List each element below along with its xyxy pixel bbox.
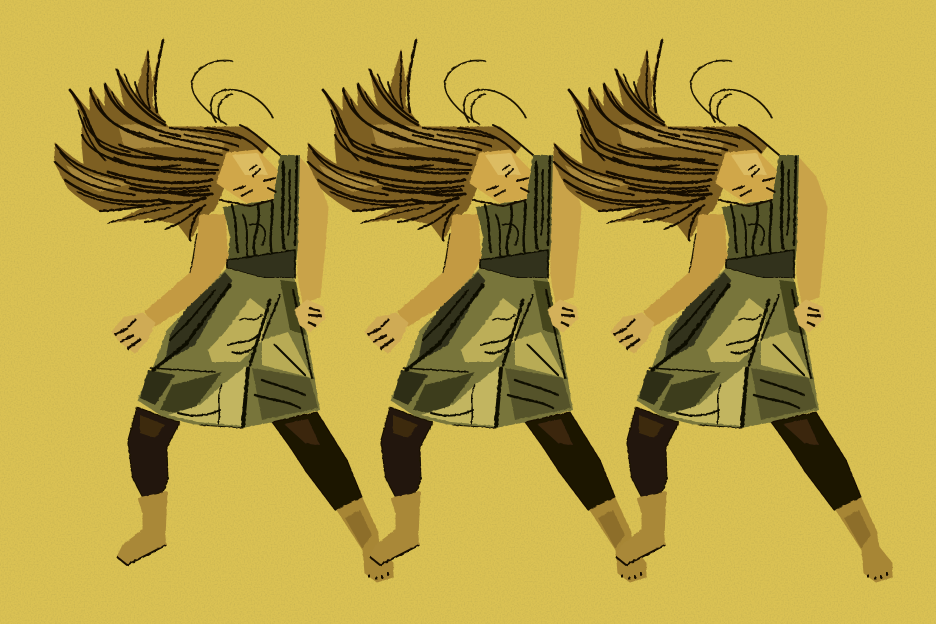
dancer figure 3: [554, 38, 892, 582]
dancer figure 2: [308, 38, 646, 582]
dancer figure 1: [55, 38, 393, 582]
